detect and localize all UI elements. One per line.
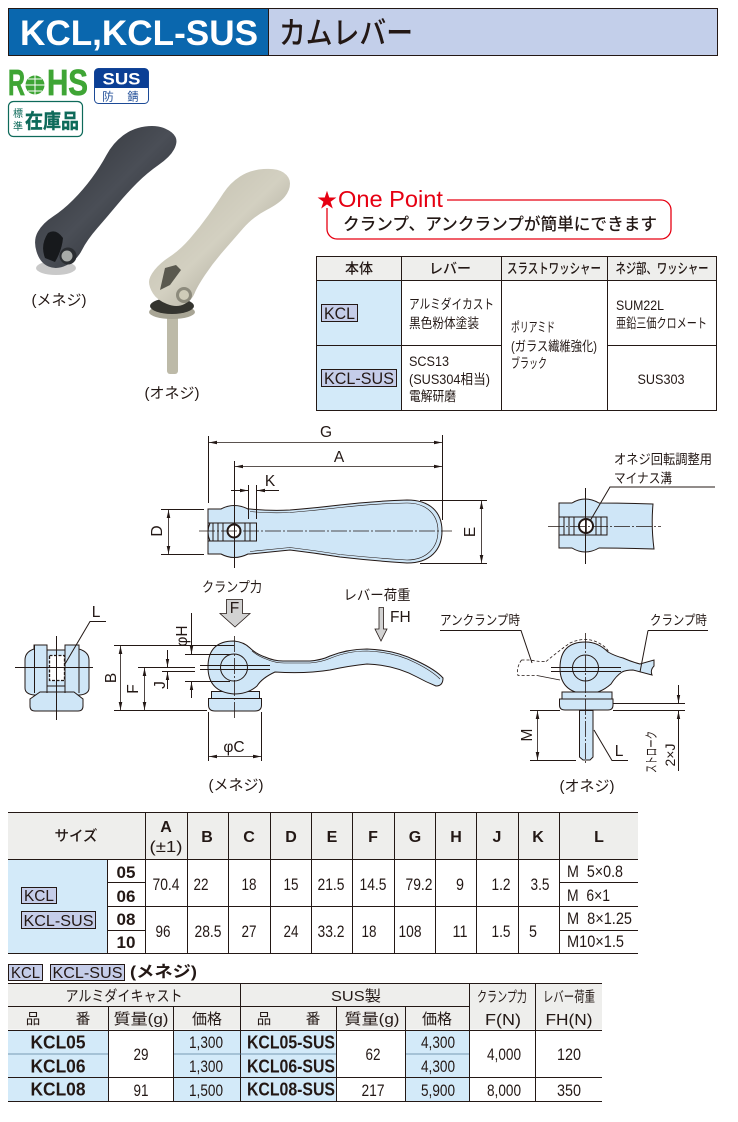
table: materials: (SUS304相当) bbox=[409, 372, 490, 387]
table: dimensions: 05 bbox=[117, 863, 135, 882]
table: part numbers and prices: レバー荷重 bbox=[543, 989, 595, 1006]
table: materials: ポリアミド bbox=[511, 320, 555, 335]
callout: One Point: ★ bbox=[317, 190, 337, 212]
table: dimensions: 96 bbox=[156, 922, 170, 941]
table: materials: スラストワッシャー bbox=[507, 260, 601, 276]
table: dimensions: 11 bbox=[452, 922, 468, 941]
icon: SUS anti-rust badge: 錆 bbox=[127, 90, 139, 104]
table: part numbers and prices: KCL05-SUS bbox=[247, 1032, 335, 1052]
arrow: clamp force F bbox=[202, 579, 262, 627]
table: materials: SCS13 bbox=[409, 354, 449, 369]
table: dimensions: サイズ bbox=[54, 827, 98, 845]
table: dimensions bbox=[8, 812, 638, 954]
title banner bbox=[8, 8, 718, 56]
table: dimensions: A bbox=[160, 819, 172, 836]
table: dimensions: 22 bbox=[194, 875, 208, 894]
table: materials: SUS303 bbox=[638, 372, 684, 387]
drawing: female thread side view with dimensions B F J H C: B bbox=[103, 673, 120, 683]
drawing: female thread side view with dimensions B F J H C: φH bbox=[174, 625, 191, 647]
photo: black female-thread lever bbox=[35, 126, 176, 275]
drawing: slot detail view: マイナス溝 bbox=[614, 471, 672, 486]
drawing: top view with dimensions G A K D E: A bbox=[334, 449, 345, 466]
drawing: female thread side view with dimensions B F J H C bbox=[103, 613, 443, 761]
table: materials: SUM22L bbox=[616, 298, 664, 313]
table: dimensions: C bbox=[243, 829, 255, 846]
table: dimensions: 70.4 bbox=[152, 875, 180, 894]
icon: SUS anti-rust badge: 防 bbox=[102, 90, 114, 104]
table: dimensions: 08 bbox=[117, 910, 135, 929]
table: dimensions: L bbox=[594, 829, 604, 846]
table: materials: KCL-SUS bbox=[324, 370, 394, 388]
table: dimensions: K bbox=[532, 829, 544, 846]
drawing: male thread view with clamp positions: クランプ時 bbox=[650, 613, 707, 628]
drawing: front section view bbox=[15, 604, 106, 720]
table: dimensions: M 5×0.8 bbox=[567, 863, 623, 881]
table: dimensions: M 6×1 bbox=[567, 887, 610, 905]
table: part numbers and prices: KCL06 bbox=[30, 1056, 86, 1076]
drawing: top view with dimensions G A K D E: E bbox=[462, 527, 479, 537]
table: dimensions: KCL bbox=[24, 888, 54, 905]
icon: standard stock badge: 在庫品 bbox=[25, 110, 79, 133]
icon: RoHS mark: HS bbox=[47, 62, 88, 103]
heading: female thread price list: (メネジ) bbox=[130, 963, 197, 981]
table: part numbers and prices: KCL06-SUS bbox=[247, 1056, 335, 1076]
table: part numbers and prices: SUS製 bbox=[331, 988, 381, 1005]
drawing: male thread view with clamp positions: L bbox=[615, 743, 624, 760]
label: female thread photo: (メネジ) bbox=[32, 292, 86, 309]
table: part numbers and prices: F(N) bbox=[485, 1012, 521, 1029]
drawing: female thread side view with dimensions B F J H C: F bbox=[125, 684, 142, 694]
arrow: lever load FH bbox=[344, 587, 411, 641]
table: dimensions: G bbox=[409, 829, 421, 846]
icon: RoHS mark: R bbox=[8, 62, 25, 103]
arrow: clamp force F: F bbox=[230, 600, 239, 617]
drawing: slot detail view: オネジ回転調整用 bbox=[614, 452, 712, 467]
drawing: male thread view with clamp positions: 2×J bbox=[662, 744, 678, 766]
heading: female thread price list bbox=[8, 963, 197, 982]
table: materials bbox=[316, 256, 716, 410]
table: part numbers and prices: 91 bbox=[134, 1081, 148, 1100]
table: materials: ネジ部、ワッシャー bbox=[616, 260, 708, 276]
drawing: female thread side view with dimensions B F J H C: J bbox=[152, 681, 169, 689]
table: part numbers and prices: 8,000 bbox=[487, 1081, 521, 1100]
table: dimensions: 79.2 bbox=[406, 875, 432, 894]
table: part numbers and prices: クランプ力 bbox=[477, 989, 527, 1006]
table: materials: レバー bbox=[429, 260, 471, 276]
label: female thread view: (メネジ) bbox=[208, 777, 264, 794]
table: dimensions: H bbox=[450, 829, 462, 846]
table: dimensions: M 8×1.25 bbox=[567, 910, 632, 928]
table: dimensions: (±1) bbox=[150, 839, 182, 856]
table: part numbers and prices: 120 bbox=[557, 1045, 581, 1064]
table: part numbers and prices: 番 bbox=[306, 1011, 321, 1028]
drawing: top view with dimensions G A K D E: D bbox=[149, 525, 166, 537]
table: part numbers and prices: 29 bbox=[134, 1045, 148, 1064]
drawing: top view with dimensions G A K D E: K bbox=[265, 473, 276, 490]
table: part numbers and prices: 質量(g) bbox=[114, 1010, 168, 1028]
table: part numbers and prices: 5,900 bbox=[421, 1081, 455, 1100]
table: materials: 亜鉛三価クロメート bbox=[616, 316, 707, 331]
table: part numbers and prices bbox=[8, 984, 602, 1102]
table: dimensions: 18 bbox=[242, 875, 256, 894]
drawing: male thread view with clamp positions bbox=[440, 613, 708, 773]
callout: One Point: One Point bbox=[338, 186, 444, 212]
table: dimensions: 24 bbox=[284, 922, 298, 941]
title banner: KCL,KCL-SUS bbox=[20, 14, 258, 53]
table: part numbers and prices: 350 bbox=[557, 1081, 581, 1100]
table: part numbers and prices: 番 bbox=[76, 1011, 91, 1028]
table: dimensions: KCL-SUS bbox=[24, 913, 94, 930]
arrow: lever load FH: レバー荷重 bbox=[344, 587, 410, 603]
table: part numbers and prices: KCL05 bbox=[30, 1032, 86, 1052]
table: materials: (ガラス繊維強化) bbox=[511, 339, 597, 354]
heading: female thread price list: KCL-SUS bbox=[52, 965, 122, 982]
table: dimensions: 10 bbox=[117, 933, 135, 952]
table: dimensions: 9 bbox=[456, 875, 464, 894]
table: part numbers and prices: 1,500 bbox=[189, 1081, 223, 1100]
table: part numbers and prices: 質量(g) bbox=[344, 1010, 400, 1028]
icon: standard stock badge bbox=[8, 102, 82, 136]
label: male thread photo: (オネジ) bbox=[144, 385, 200, 402]
drawing: male thread view with clamp positions: アンクランプ時 bbox=[440, 613, 520, 628]
table: dimensions: 18 bbox=[362, 922, 376, 941]
table: dimensions: 3.5 bbox=[530, 875, 550, 894]
icon: standard stock badge: 準 bbox=[13, 120, 23, 133]
table: part numbers and prices: 1,300 bbox=[189, 1033, 223, 1052]
arrow: lever load FH: FH bbox=[390, 609, 411, 626]
table: dimensions: 06 bbox=[117, 887, 135, 906]
table: part numbers and prices: KCL08 bbox=[30, 1080, 86, 1100]
label: male thread view: (オネジ) bbox=[560, 778, 614, 795]
title banner: カムレバー bbox=[279, 16, 413, 51]
icon: standard stock badge: 標 bbox=[13, 107, 23, 120]
table: dimensions: 21.5 bbox=[318, 875, 344, 894]
table: part numbers and prices: 品 bbox=[26, 1011, 40, 1028]
table: dimensions: B bbox=[201, 829, 213, 846]
table: part numbers and prices: 62 bbox=[366, 1045, 380, 1064]
heading: female thread price list: KCL bbox=[11, 965, 40, 982]
icon: SUS anti-rust badge: SUS bbox=[102, 70, 140, 88]
table: materials: 電解研磨 bbox=[409, 389, 456, 404]
drawing: male thread view with clamp positions: M bbox=[519, 729, 536, 741]
table: dimensions: 5 bbox=[529, 922, 537, 941]
table: dimensions: 28.5 bbox=[194, 922, 222, 941]
table: part numbers and prices: 価格 bbox=[192, 1011, 222, 1028]
table: dimensions: 33.2 bbox=[318, 922, 344, 941]
table: part numbers and prices: KCL08-SUS bbox=[247, 1080, 335, 1100]
table: materials: KCL bbox=[324, 305, 355, 323]
icon: SUS anti-rust badge bbox=[94, 68, 148, 104]
table: part numbers and prices: 1,300 bbox=[189, 1057, 223, 1076]
table: dimensions: 1.5 bbox=[492, 922, 510, 941]
table: materials: 黒色粉体塗装 bbox=[409, 316, 479, 331]
table: part numbers and prices: アルミダイキャスト bbox=[66, 988, 182, 1005]
drawing: top view with dimensions G A K D E: G bbox=[320, 424, 332, 441]
table: part numbers and prices: 価格 bbox=[422, 1011, 452, 1028]
table: dimensions: 14.5 bbox=[360, 875, 386, 894]
drawing: top view with dimensions G A K D E bbox=[149, 424, 487, 568]
table: part numbers and prices: 217 bbox=[362, 1081, 384, 1100]
table: dimensions: J bbox=[493, 829, 501, 846]
drawing: female thread side view with dimensions B F J H C: φC bbox=[223, 739, 245, 756]
callout: One Point bbox=[317, 186, 671, 239]
table: materials: ブラック bbox=[511, 355, 547, 371]
table: dimensions: M10×1.5 bbox=[567, 933, 624, 951]
callout: One Point: クランプ、アンクランプが簡単にできます bbox=[343, 214, 657, 234]
table: dimensions: 27 bbox=[242, 922, 256, 941]
table: dimensions: 15 bbox=[284, 875, 298, 894]
table: dimensions: 108 bbox=[398, 922, 422, 941]
photo: stainless male-thread lever bbox=[149, 169, 290, 374]
table: part numbers and prices: 品 bbox=[257, 1011, 271, 1028]
table: dimensions: E bbox=[327, 829, 338, 846]
table: dimensions: 1.2 bbox=[492, 875, 510, 894]
drawing: male thread view with clamp positions: ストローク bbox=[644, 731, 659, 773]
drawing: front section view: L bbox=[92, 604, 101, 621]
table: dimensions: D bbox=[285, 829, 297, 846]
icon: RoHS mark bbox=[8, 62, 88, 103]
drawing: slot detail view bbox=[548, 452, 715, 564]
table: part numbers and prices: 4,300 bbox=[421, 1057, 455, 1076]
table: dimensions: F bbox=[368, 829, 378, 846]
table: part numbers and prices: 4,300 bbox=[421, 1033, 455, 1052]
table: part numbers and prices: 4,000 bbox=[487, 1045, 521, 1064]
table: materials: アルミダイカスト bbox=[409, 297, 494, 312]
table: materials: 本体 bbox=[345, 260, 373, 276]
arrow: clamp force F: クランプ力 bbox=[202, 579, 262, 595]
table: part numbers and prices: FH(N) bbox=[546, 1012, 592, 1029]
